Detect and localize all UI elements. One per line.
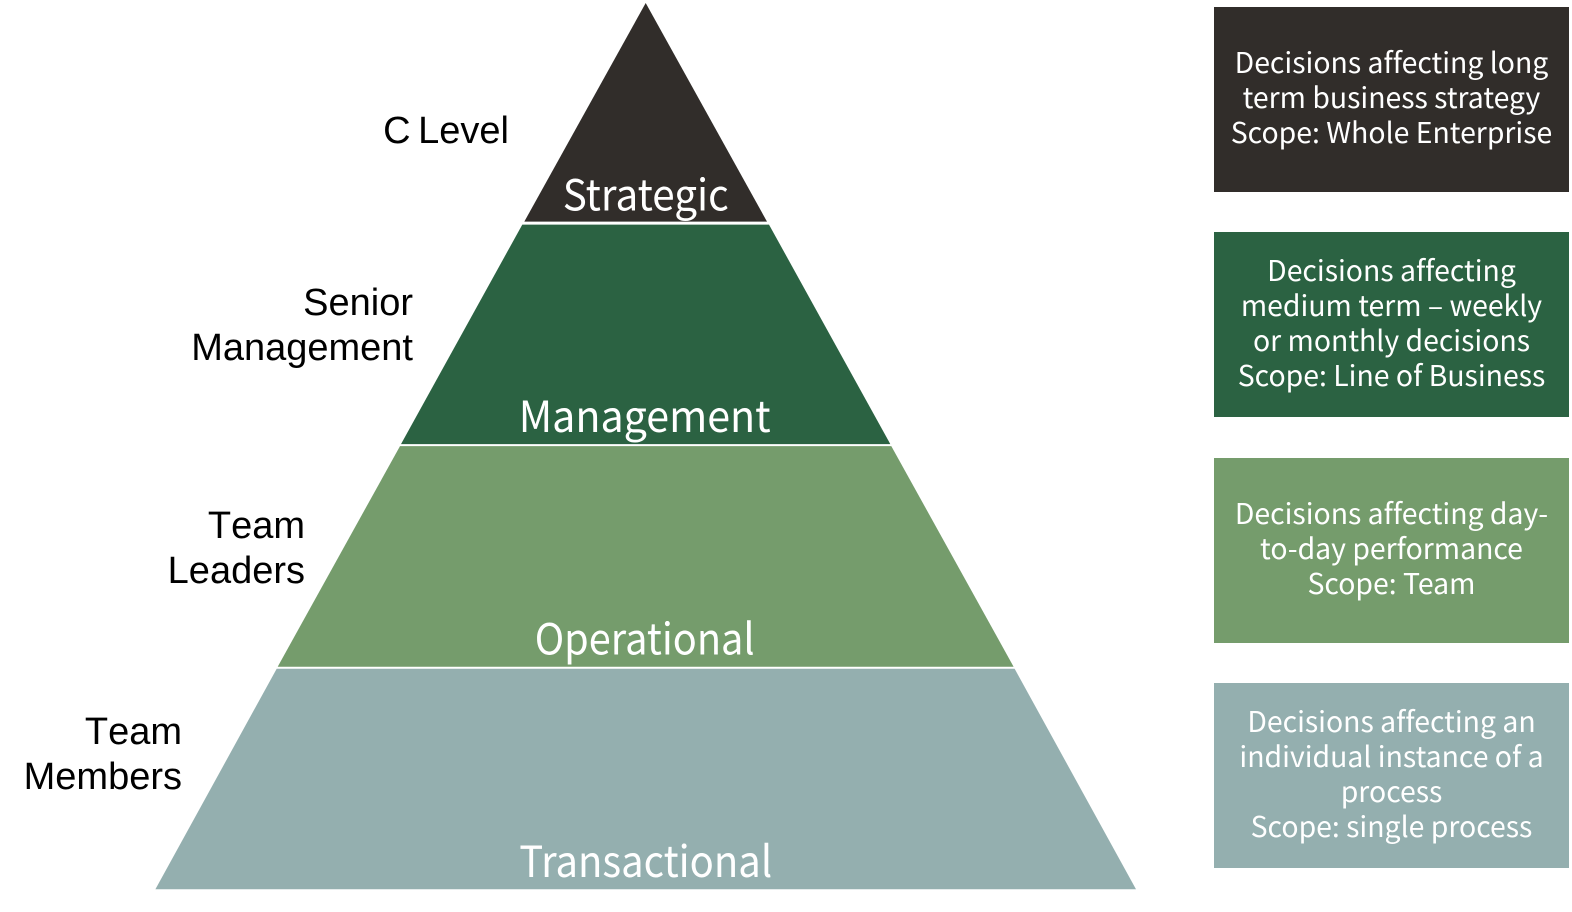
- pyramid tier: Strategic: [524, 3, 767, 224]
- label: Team Members: [24, 711, 182, 798]
- pyramid tier: Strategic: Strategic: [563, 162, 729, 224]
- panel: transactional description: Decisions affecting an: [1247, 700, 1536, 740]
- pyramid tier: Operational: Operational: [535, 606, 755, 668]
- panel: transactional description: Scope: single process: [1251, 804, 1532, 846]
- panel: operational description: Decisions affecting day-: [1235, 492, 1548, 533]
- panel: management description: Decisions affecting: [1267, 248, 1516, 290]
- panel: transactional description: individual instance of a: [1239, 734, 1544, 776]
- panel: management description: [1214, 232, 1569, 416]
- panel: strategic description: Decisions affecting long: [1235, 41, 1548, 82]
- label: Senior Management: Senior: [303, 282, 413, 324]
- pyramid tier: Transactional: [155, 669, 1136, 890]
- label: Senior Management: [191, 282, 413, 368]
- label: Team Members: Members: [24, 756, 182, 798]
- panel: management description: or monthly decisions: [1253, 318, 1530, 360]
- panel: strategic description: Scope: Whole Enterprise: [1231, 111, 1552, 152]
- pyramid tier: Operational: [278, 446, 1014, 668]
- pyramid tier: Transactional: Transactional: [519, 828, 772, 890]
- panel: strategic description: term business strategy: [1243, 76, 1540, 117]
- pyramid tier: Management: [401, 225, 890, 445]
- panel: management description: medium term – weekly: [1241, 284, 1542, 324]
- panel: operational description: Scope: Team: [1308, 562, 1475, 603]
- panel: management description: Scope: Line of Business: [1238, 354, 1545, 394]
- panel: operational description: to-day performance: [1260, 527, 1523, 568]
- panel: transactional description: [1214, 683, 1569, 868]
- label: Team Leaders: [168, 505, 305, 592]
- panel: operational description: [1214, 458, 1569, 642]
- label: Team Members: Team: [85, 711, 182, 753]
- label: Senior Management: Management: [191, 326, 413, 368]
- label: C Level: C Level: [383, 110, 509, 152]
- label: Team Leaders: Leaders: [168, 550, 305, 592]
- panel: transactional description: process: [1341, 770, 1442, 810]
- panel: strategic description: [1214, 7, 1569, 192]
- pyramid tier: Management: Management: [519, 383, 771, 445]
- label: Team Leaders: Team: [208, 505, 305, 547]
